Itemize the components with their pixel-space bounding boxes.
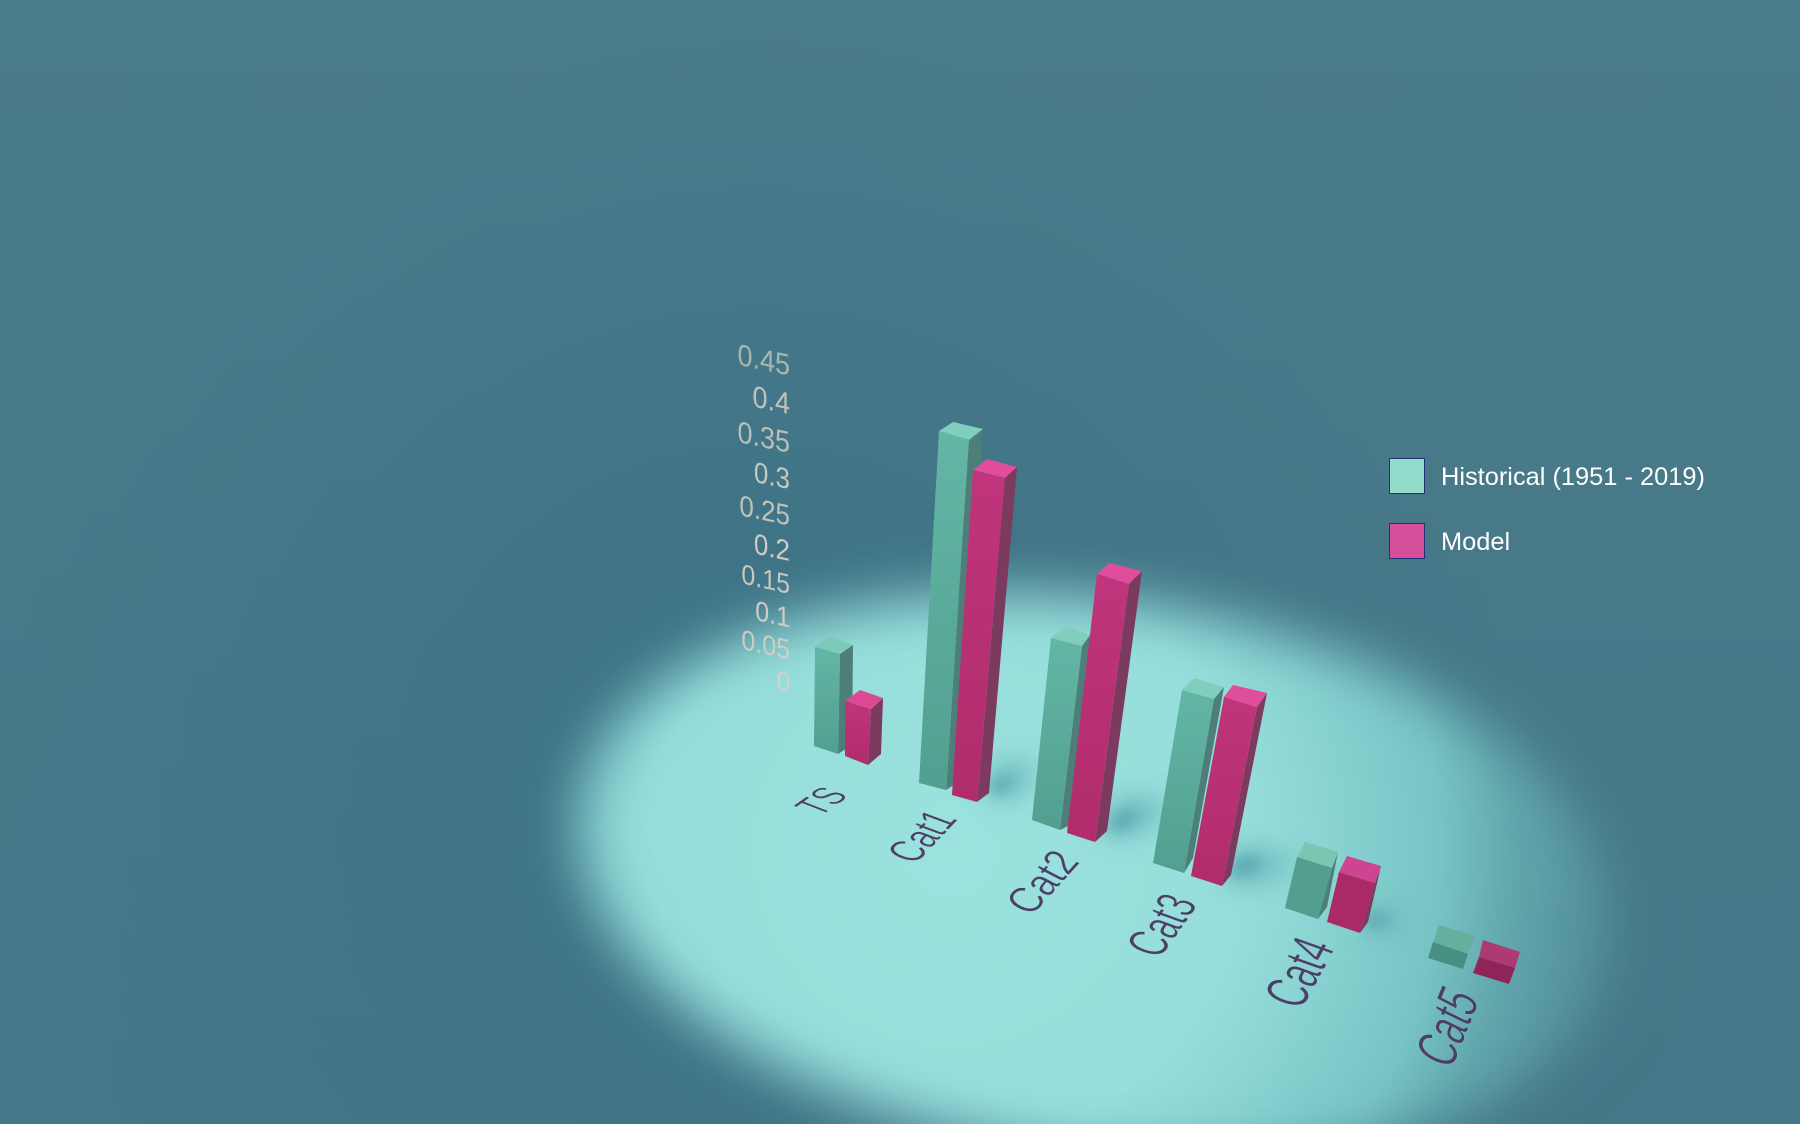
- y-axis labels: [737, 339, 790, 698]
- x-axis category labels: Cat1: [876, 805, 969, 868]
- legend: historical swatch: [1390, 458, 1424, 494]
- spotlight floor: [543, 558, 1624, 1124]
- legend: model label: Model: [1441, 528, 1510, 556]
- y-axis labels: 0.4: [752, 380, 790, 422]
- x-axis category labels: [784, 782, 1492, 1077]
- y-axis labels: 0.2: [754, 527, 790, 567]
- y-axis labels: 0.1: [755, 595, 790, 634]
- y-axis labels: 0.45: [737, 339, 790, 383]
- y-axis labels: 0.15: [741, 558, 790, 600]
- y-axis labels: 0.35: [737, 416, 790, 460]
- bar: Cat5 model: [1473, 940, 1520, 984]
- bar: Cat4 historical: [1285, 842, 1338, 919]
- bar: TS model: [845, 690, 883, 765]
- bar shadows: [985, 760, 1410, 932]
- bar: Cat1 model: [952, 459, 1017, 802]
- x-axis category labels: Cat3: [1115, 888, 1210, 964]
- x-axis category labels: Cat2: [994, 843, 1090, 921]
- y-axis labels: 0.05: [741, 624, 790, 666]
- bar: Cat5 historical: [1428, 925, 1475, 969]
- bar: Cat4 model: [1327, 856, 1381, 933]
- legend: historical label: Historical (1951 - 2019): [1441, 463, 1705, 491]
- bar: Cat3 historical: [1153, 678, 1224, 873]
- bar: TS historical: [814, 636, 853, 754]
- legend: model swatch: [1390, 524, 1424, 558]
- legend: [1390, 458, 1705, 558]
- bar: Cat2 historical: [1032, 626, 1090, 830]
- y-axis labels: 0.3: [754, 456, 790, 496]
- x-axis category labels: Cat5: [1404, 977, 1492, 1077]
- bar chart: [814, 422, 1520, 984]
- y-axis labels: 0: [777, 666, 790, 698]
- y-axis labels: 0.25: [739, 489, 790, 532]
- bar: Cat1 historical: [919, 422, 983, 790]
- x-axis category labels: Cat4: [1251, 930, 1348, 1015]
- bar: Cat2 model: [1067, 563, 1142, 842]
- x-axis category labels: TS: [784, 782, 858, 820]
- bar: Cat3 model: [1191, 685, 1267, 886]
